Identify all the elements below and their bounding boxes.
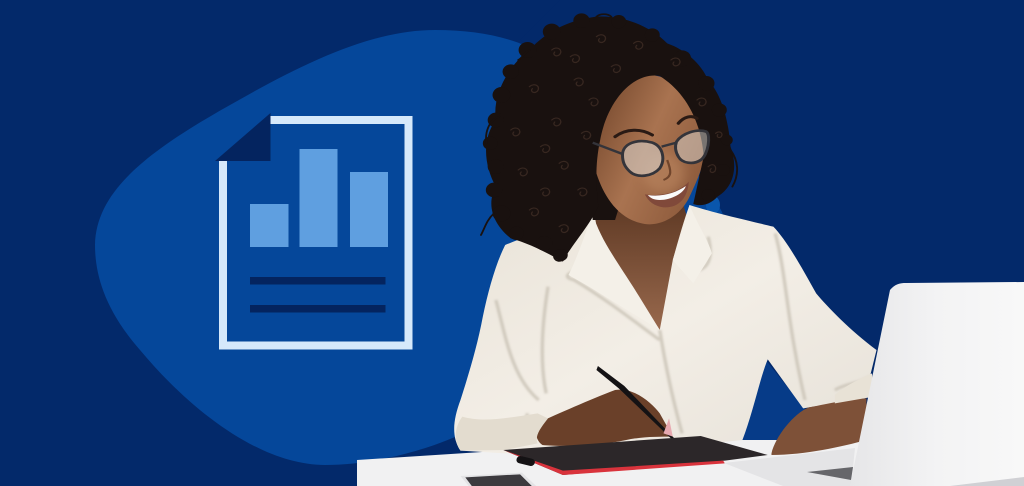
face [595, 75, 706, 224]
neck and chest [589, 200, 693, 333]
glasses [593, 131, 709, 176]
left cuff [456, 413, 548, 451]
right cuff [835, 373, 874, 403]
eyebrows [615, 117, 697, 137]
hair curls [511, 35, 722, 232]
smile [645, 182, 689, 207]
stylus pen [596, 366, 677, 441]
right forearm and hand [771, 398, 866, 455]
laptop keyboard [807, 467, 853, 480]
left forearm and hand [536, 390, 673, 446]
stray curls [481, 14, 737, 261]
phone [460, 473, 538, 486]
desk [357, 430, 1024, 486]
hair edge clumps [483, 13, 733, 261]
cheek highlight [643, 153, 684, 193]
fingernails [663, 418, 673, 437]
laptop base [724, 448, 855, 486]
navy cover right of woman [520, 0, 1024, 486]
laptop lid [850, 282, 1024, 486]
small blob patch by shoulder [706, 196, 720, 214]
nose [663, 160, 670, 180]
drawing tablet [503, 436, 768, 475]
hair [481, 13, 737, 262]
page fold [215, 113, 270, 161]
bar chart [250, 149, 388, 247]
laptop [724, 282, 1024, 486]
shirt collar [568, 213, 660, 330]
laptop lid lower edge [950, 477, 1024, 486]
page outline [223, 120, 408, 346]
woman [454, 13, 877, 486]
document icon [215, 113, 408, 346]
blob shape [95, 30, 750, 465]
gap under arm [738, 353, 809, 440]
shirt folds [496, 233, 870, 433]
hair behind face [589, 160, 634, 220]
text lines [250, 277, 386, 312]
shirt [454, 205, 877, 453]
